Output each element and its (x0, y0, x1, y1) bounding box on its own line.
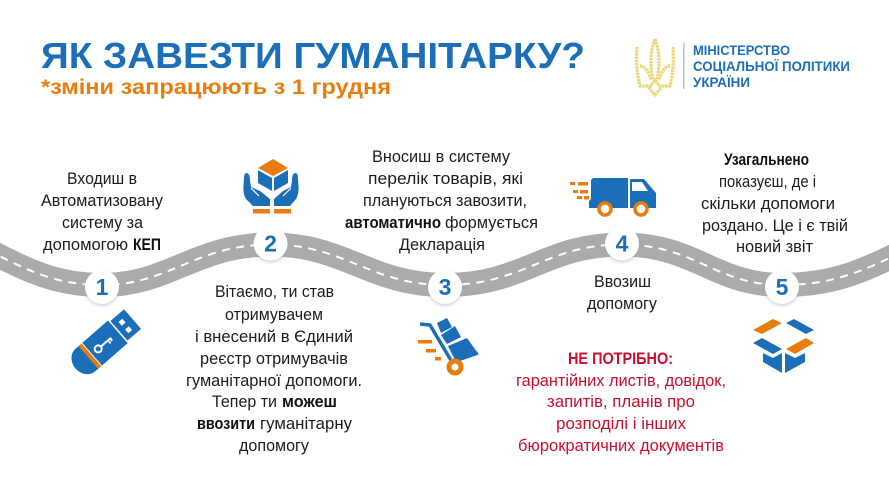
icon: delivery truck (570, 178, 656, 215)
step 3 text: перелік товарів, які (368, 169, 523, 188)
icon: hand truck with boxes (418, 318, 478, 373)
step 3 text: автоматично (345, 213, 441, 232)
step 2 marker (254, 226, 288, 260)
icon: open box (753, 319, 814, 373)
step 4 text: Ввозиш (594, 272, 651, 291)
step 3 text: формується (445, 213, 538, 232)
step 3 text: Вносиш в систему (372, 147, 510, 166)
road (0, 243, 889, 285)
not required callout: гарантійних листів, довідок, (516, 371, 726, 390)
not required callout: НЕ ПОТРІБНО: (568, 349, 673, 368)
step 1 text: Автоматизовану (41, 191, 163, 210)
icon: golden trident (637, 39, 673, 95)
step 2 text: гуманітарної допомоги. (186, 371, 362, 390)
step 5 text (701, 150, 848, 256)
step 2 text: можеш (282, 392, 337, 411)
ministry name: СОЦІАЛЬНОЇ ПОЛІТИКИ (693, 59, 850, 74)
step 1 text: КЕП (133, 235, 161, 254)
icon: USB key (66, 308, 142, 380)
step 2 text: Вітаємо, ти став (215, 282, 334, 301)
icon: hands holding box (243, 159, 299, 214)
ministry logo (637, 39, 850, 95)
step 3 text (345, 147, 538, 254)
step 2 text: реєстр отримувачів (200, 349, 348, 368)
step 4 marker (605, 226, 639, 260)
not required callout: бюрократичних документів (518, 436, 724, 455)
step 1 text: допомогою (43, 235, 128, 254)
step 2 marker: 2 (264, 230, 277, 256)
step 5 text: скільки допомоги (701, 194, 835, 213)
step 4 text: допомогу (587, 294, 657, 313)
step 2 text (186, 282, 362, 455)
step 1 text (41, 169, 163, 254)
title: ЯК ЗАВЕЗТИ ГУМАНІТАРКУ? (41, 35, 585, 76)
step 1 text: Входиш в (67, 169, 137, 188)
ministry name: МІНІСТЕРСТВО (693, 43, 790, 58)
step 3 text: плануються завозити, (363, 191, 527, 210)
step 2 text: допомогу (239, 436, 309, 455)
not required callout (516, 349, 726, 455)
step 2 text: гуманітарну (260, 414, 352, 433)
step 2 text: Тепер ти (212, 392, 277, 411)
ministry name (693, 43, 850, 90)
step 5 text: Узагальнено (724, 150, 809, 169)
step 1 marker (85, 270, 119, 304)
not required callout: розподілі і інших (556, 414, 686, 433)
step 5 marker: 5 (776, 274, 789, 300)
step 5 text: новий звіт (736, 237, 813, 256)
step 2 text: отримувачем (225, 305, 323, 324)
step 4 text (587, 272, 657, 313)
step 4 marker: 4 (616, 230, 629, 256)
step 1 text: систему за (62, 213, 144, 232)
ministry name: УКРАЇНИ (693, 75, 750, 90)
step 1 marker: 1 (96, 274, 109, 300)
step 5 text: роздано. Це і є твій (702, 216, 848, 235)
step 2 text: ввозити (197, 414, 255, 433)
subtitle: *зміни запрацюють з 1 грудня (41, 76, 391, 99)
step 3 marker: 3 (439, 274, 451, 300)
step 3 marker (428, 270, 462, 304)
step 3 text: Декларація (399, 235, 485, 254)
step 5 text: показуєш, де і (719, 172, 816, 191)
step 2 text: і внесений в Єдиний (195, 327, 353, 346)
step 5 marker (765, 270, 799, 304)
not required callout: запитів, планів про (547, 392, 695, 411)
logo divider (683, 43, 685, 89)
